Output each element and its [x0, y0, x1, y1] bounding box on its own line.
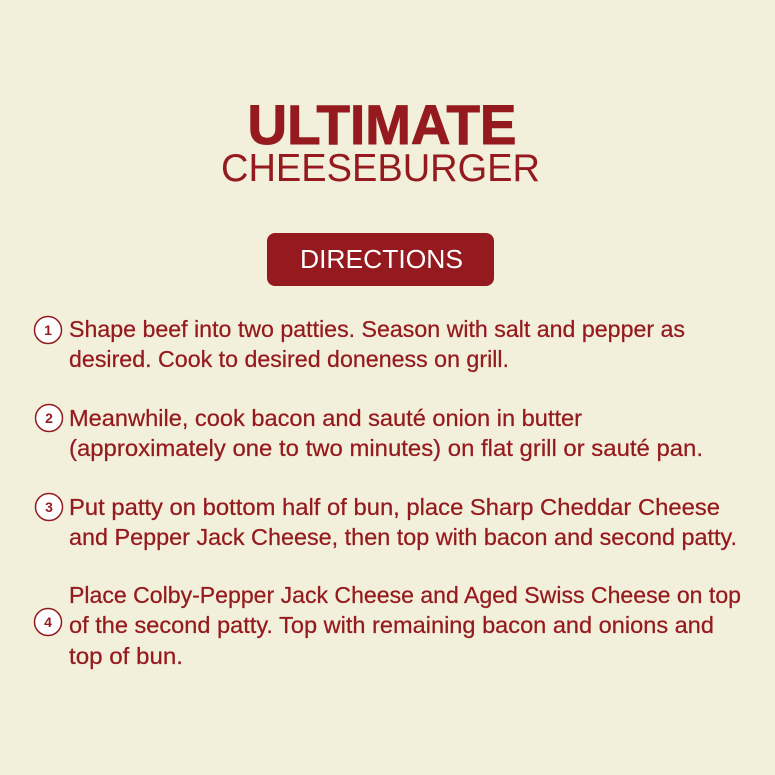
directions badge	[267, 233, 494, 286]
step 2: 2	[45, 410, 53, 426]
step 2	[36, 404, 703, 461]
step 1: Shape beef into two patties. Season with salt and pepper as	[69, 316, 685, 342]
step 2: Meanwhile, cook bacon and sauté onion in butter	[69, 405, 582, 431]
step 4: of the second patty. Top with remaining bacon and onions and	[69, 612, 714, 638]
step 4: Place Colby-Pepper Jack Cheese and Aged Swiss Cheese on top	[69, 582, 741, 608]
step 1: 1	[44, 322, 52, 338]
step 1: desired. Cook to desired doneness on grill.	[69, 346, 509, 372]
directions badge: DIRECTIONS	[300, 244, 463, 274]
step 4: 4	[44, 614, 52, 630]
step 3: and Pepper Jack Cheese, then top with bacon and second patty.	[69, 524, 737, 550]
step 2: (approximately one to two minutes) on flat grill or sauté pan.	[69, 435, 703, 461]
title: ULTIMATE	[248, 93, 516, 156]
step 4	[34, 582, 741, 669]
title: CHEESEBURGER	[221, 147, 540, 190]
step 3: Put patty on bottom half of bun, place Sharp Cheddar Cheese	[69, 494, 720, 520]
step 3: 3	[45, 499, 53, 515]
step 4: top of bun.	[69, 643, 183, 669]
title	[221, 93, 540, 190]
step 3	[36, 494, 737, 550]
step 1	[34, 316, 685, 372]
